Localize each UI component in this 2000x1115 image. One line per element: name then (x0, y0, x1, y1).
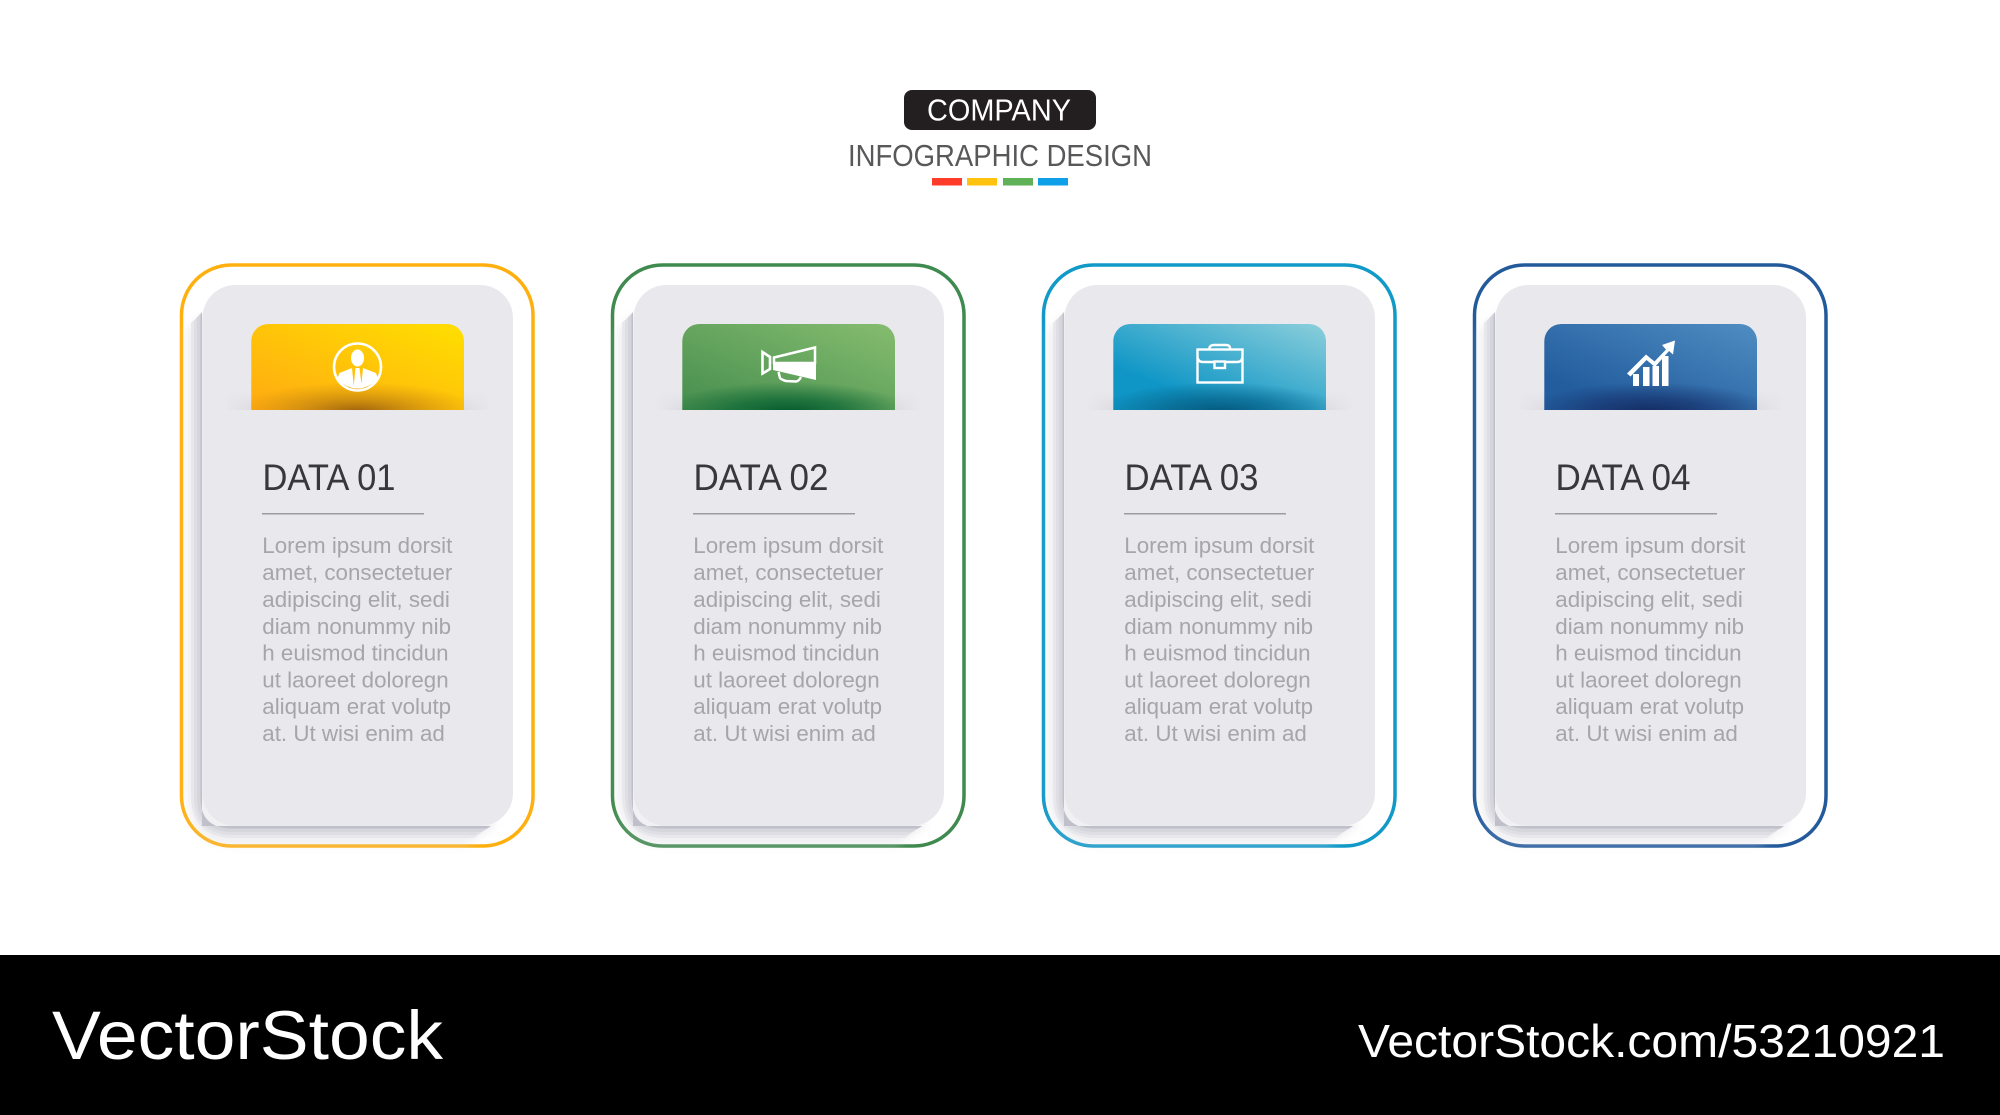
tab: navy (1544, 324, 1757, 410)
colour bars (932, 178, 1068, 186)
icon: growth chart (1627, 340, 1675, 386)
card body (186, 285, 513, 846)
panel: data 01 (182, 265, 533, 846)
card body (1479, 285, 1806, 846)
body text: at. Ut wisi enim ad (262, 721, 445, 746)
footer band (0, 955, 2000, 1115)
company badge: COMPANY (927, 92, 1071, 128)
footer url: VectorStock.com/53210921 (1358, 1015, 1945, 1067)
outer outline (612, 265, 964, 846)
body text: h euismod tincidun (693, 640, 880, 666)
body text: Lorem ipsum dorsit (1555, 533, 1746, 558)
body text: h euismod tincidun (262, 640, 449, 666)
body text: ut laoreet doloregn (1124, 668, 1311, 692)
heading: DATA 02 (694, 457, 828, 498)
body text: diam nonummy nib (1555, 614, 1744, 639)
heading: DATA 04 (1556, 457, 1690, 498)
card body (617, 285, 944, 846)
panel: data 04 (1474, 265, 1826, 846)
body text: amet, consectetuer (262, 560, 453, 585)
outer outline (1474, 265, 1826, 846)
body text: adipiscing elit, sedi (1555, 587, 1743, 612)
body text: ut laoreet doloregn (262, 668, 449, 692)
tab: green (682, 324, 895, 410)
body text: diam nonummy nib (262, 614, 451, 639)
divider (1124, 513, 1286, 514)
heading: DATA 03 (1124, 457, 1258, 498)
body text: aliquam erat volutp (1124, 694, 1313, 719)
card body (1048, 285, 1375, 846)
icon: person in circle (334, 344, 381, 390)
header: company title block (848, 90, 1152, 186)
body text: aliquam erat volutp (693, 694, 882, 719)
body text: aliquam erat volutp (262, 694, 451, 719)
outer outline (182, 265, 533, 846)
footer logo text: VectorStock (52, 997, 444, 1074)
body text: adipiscing elit, sedi (262, 587, 450, 612)
panel: data 02 (612, 265, 964, 846)
body text: Lorem ipsum dorsit (1124, 533, 1315, 558)
body text: at. Ut wisi enim ad (1124, 721, 1307, 746)
body text: amet, consectetuer (1124, 560, 1315, 585)
divider (693, 513, 855, 514)
tab: blue (1113, 324, 1326, 410)
body text: at. Ut wisi enim ad (693, 721, 876, 746)
divider (1555, 513, 1717, 514)
body text: h euismod tincidun (1124, 640, 1311, 666)
body text: diam nonummy nib (1124, 614, 1313, 639)
divider (262, 513, 424, 514)
body text: Lorem ipsum dorsit (693, 533, 884, 558)
body text: amet, consectetuer (693, 560, 884, 585)
icon: briefcase (1198, 345, 1242, 382)
body text: amet, consectetuer (1555, 560, 1746, 585)
body text: diam nonummy nib (693, 614, 882, 639)
body text: adipiscing elit, sedi (1124, 587, 1312, 612)
body text: at. Ut wisi enim ad (1555, 721, 1738, 746)
body text: aliquam erat volutp (1555, 694, 1744, 719)
panel: data 03 (1044, 265, 1395, 846)
body text: ut laoreet doloregn (693, 668, 880, 692)
outer outline (1044, 265, 1395, 846)
body text: Lorem ipsum dorsit (262, 533, 453, 558)
body text: adipiscing elit, sedi (693, 587, 881, 612)
heading: DATA 01 (262, 457, 396, 498)
body text: h euismod tincidun (1555, 640, 1742, 666)
tab: yellow (251, 324, 464, 410)
body text: ut laoreet doloregn (1555, 668, 1742, 692)
subtitle: INFOGRAPHIC DESIGN (848, 138, 1152, 173)
icon: megaphone (762, 348, 816, 382)
